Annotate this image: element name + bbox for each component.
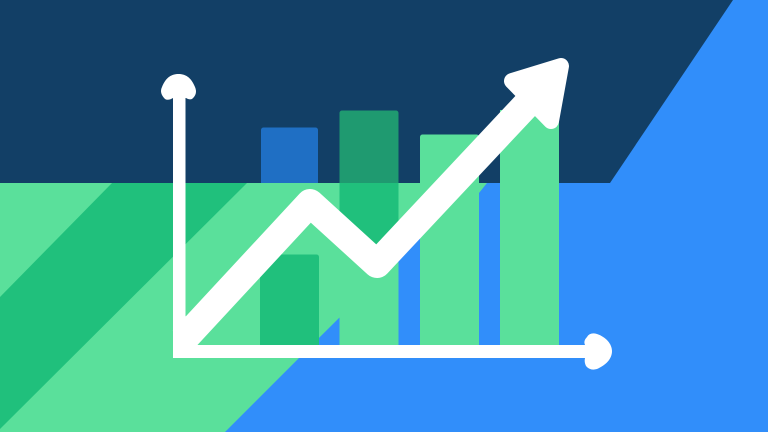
arrow head <box>512 66 561 121</box>
arrow shaft <box>183 103 528 340</box>
blue wedge between bars 1 and 2 <box>319 318 340 345</box>
bar 1: upper blue part <box>261 128 318 183</box>
bar 3 <box>420 134 479 345</box>
arrow base fill at axis corner <box>173 316 198 346</box>
bar 1: lower green part <box>260 254 319 345</box>
background: dark green diagonal band <box>0 183 247 429</box>
bar 2: lower light green part <box>340 230 398 345</box>
horizontal axis with cap <box>173 333 612 370</box>
trend arrow <box>173 66 561 346</box>
background: navy upper panel <box>0 0 733 183</box>
vertical axis with cap <box>161 74 196 358</box>
bar 4 <box>500 110 559 345</box>
bar chart <box>260 110 559 345</box>
bar 2: upper muted green part <box>340 110 398 183</box>
background: light green diagonal panel <box>0 183 487 432</box>
bar 2: middle green part <box>340 183 398 262</box>
